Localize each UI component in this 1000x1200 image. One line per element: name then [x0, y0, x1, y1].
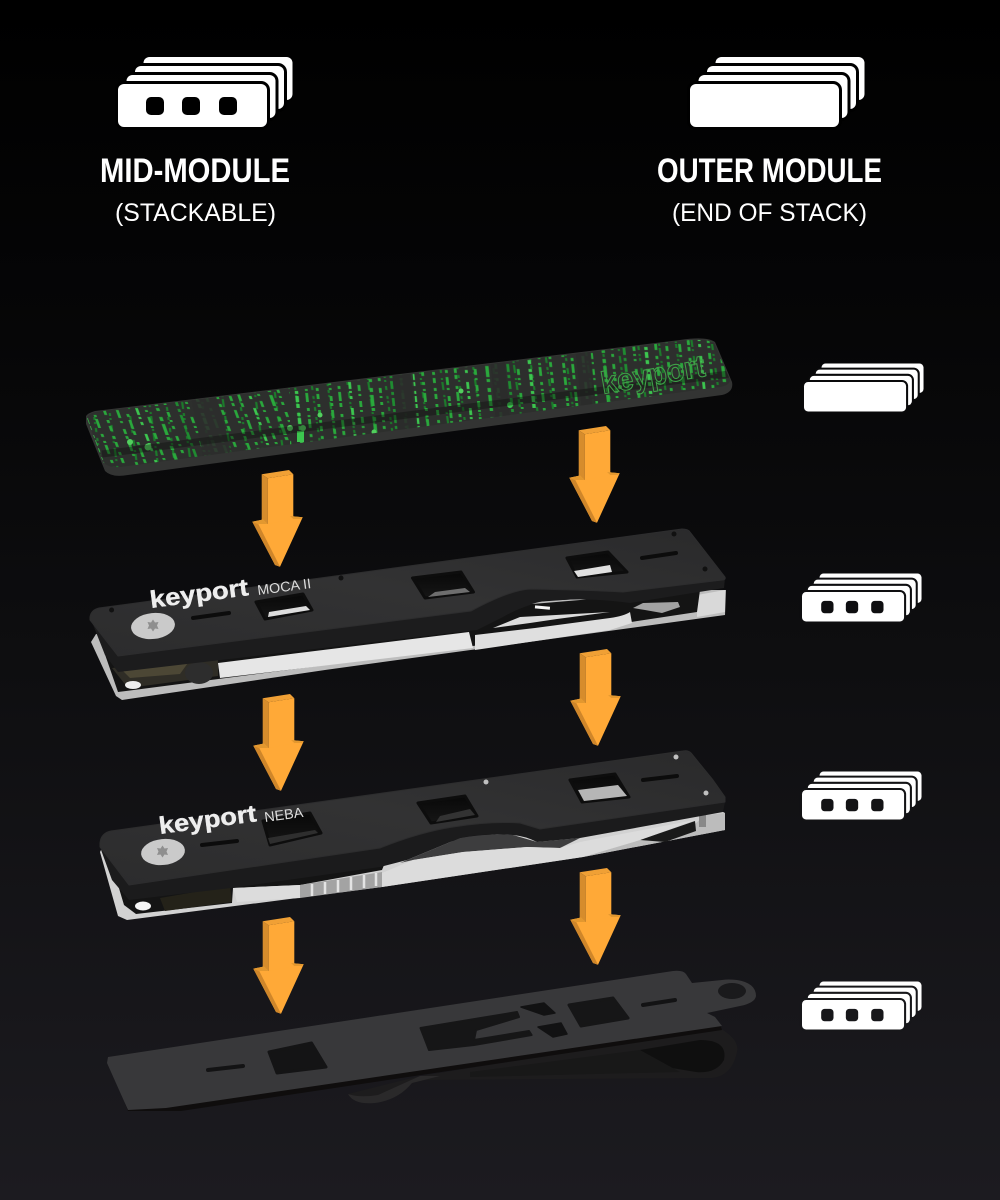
icon: mid-module stack	[118, 57, 292, 127]
black side wall	[92, 578, 725, 672]
arrow: NEBA to clip left	[253, 917, 304, 1014]
arrow: MOCA to NEBA left	[253, 694, 304, 791]
icon: mid-module marker, clip row	[802, 982, 922, 1029]
heading: outer module: OUTER MODULE	[657, 152, 882, 190]
serrations	[300, 872, 382, 898]
logo on cover: keyport	[598, 348, 708, 401]
plate edge	[108, 1024, 722, 1111]
brand text: keyport	[157, 800, 258, 840]
screw	[130, 611, 176, 641]
mid-module: MOCA II	[90, 529, 726, 700]
rear section	[583, 813, 725, 857]
arrow: cover to MOCA left	[252, 470, 303, 567]
icon: outer module marker, cover row	[804, 364, 924, 411]
windows	[256, 594, 312, 619]
arrow: MOCA to NEBA right	[570, 649, 621, 746]
blade	[382, 820, 695, 887]
outer module: matrix cover plate	[80, 330, 740, 480]
silver base	[100, 800, 725, 920]
blank gaps in rain	[196, 352, 596, 456]
clip spring	[348, 1028, 737, 1103]
icon: mid-module marker, MOCA row	[802, 574, 922, 621]
outer module: pocket clip	[107, 971, 756, 1111]
model name: MOCA II	[256, 575, 312, 598]
model name: NEBA	[263, 804, 305, 825]
brand text: keyport	[148, 574, 250, 614]
arrow: cover to MOCA right	[569, 426, 620, 523]
silver base	[91, 590, 726, 700]
cutouts	[269, 1043, 326, 1073]
icon: outer module stack	[690, 57, 864, 127]
bright glyph patches	[127, 385, 622, 450]
plate	[107, 971, 756, 1110]
dark wedge under blade	[640, 821, 696, 842]
blade belly	[400, 834, 580, 863]
blades	[218, 632, 473, 678]
heading: mid-module: MID-MODULE	[100, 152, 290, 190]
icon: mid-module marker, NEBA row	[802, 772, 922, 819]
top plate	[90, 529, 725, 656]
ring hole	[718, 983, 746, 999]
windows	[263, 813, 321, 845]
heading: mid-module	[100, 152, 290, 227]
top plate	[100, 751, 725, 885]
heading: outer module: (END OF STACK)	[672, 199, 867, 227]
screw	[140, 837, 186, 867]
mid-module: NEBA	[100, 751, 725, 920]
side wall	[100, 802, 725, 900]
heading: outer module	[657, 152, 882, 227]
heading: mid-module: (STACKABLE)	[115, 199, 276, 227]
arrow: NEBA to clip right	[570, 868, 621, 965]
